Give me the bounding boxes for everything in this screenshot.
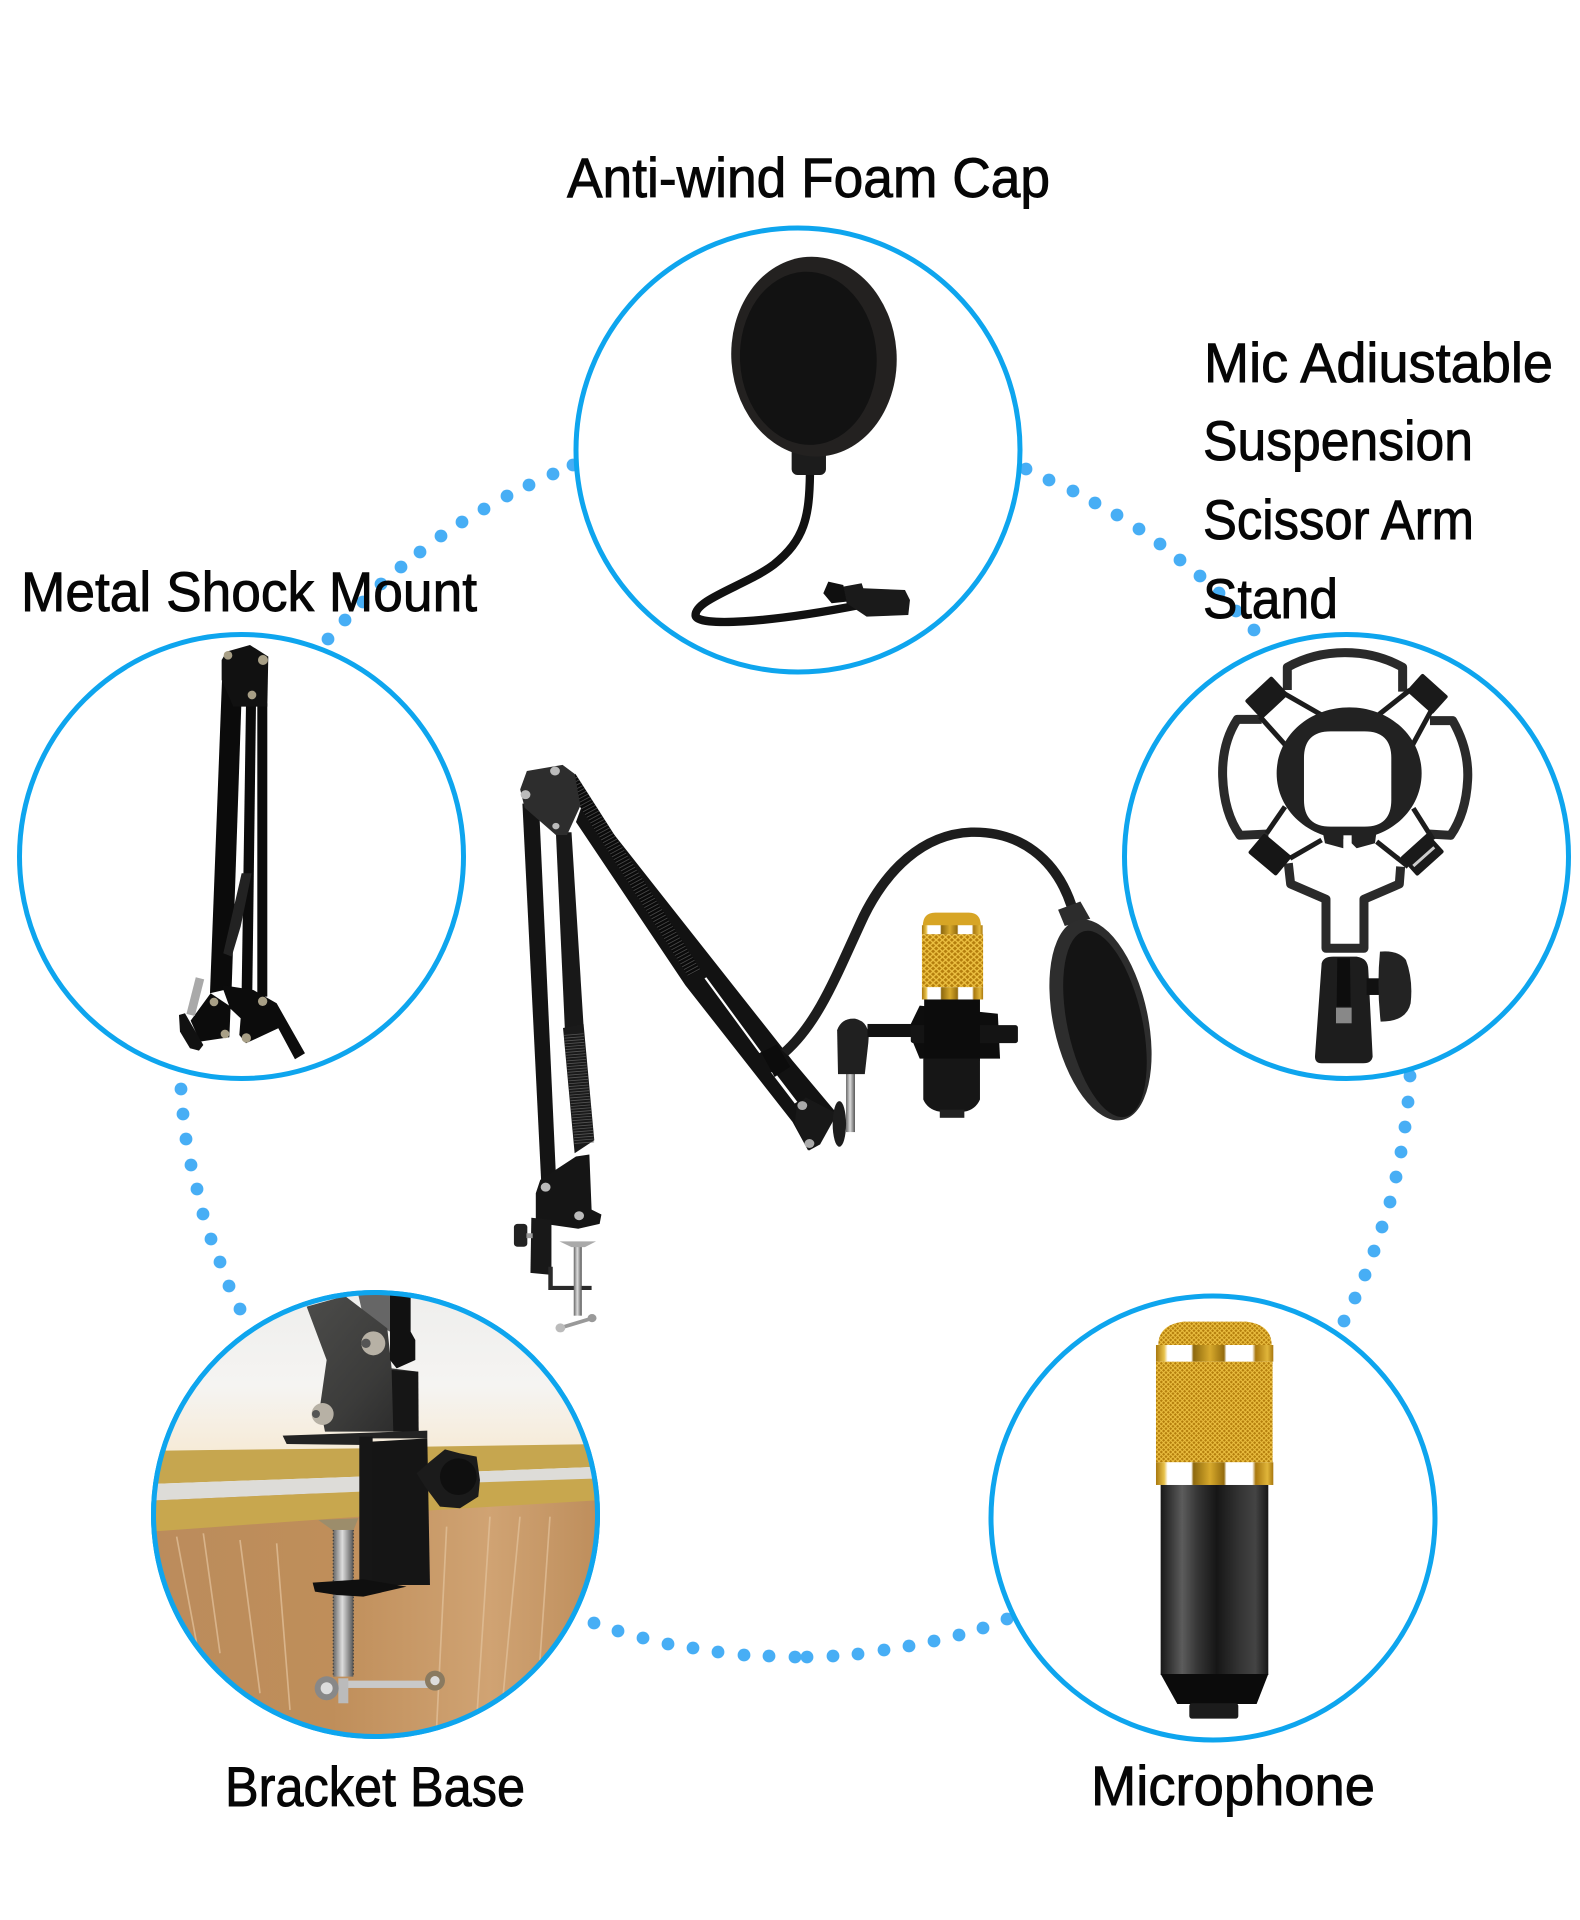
- dots: shock mount to bracket base: [175, 1083, 246, 1315]
- label: mic adjustable suspension scissor arm stand: Scissor Arm: [1203, 488, 1474, 551]
- boom arm: [514, 765, 837, 1332]
- dotted connector ring: [175, 459, 1416, 1663]
- icon: folded scissor arm: [179, 645, 305, 1059]
- label: mic adjustable suspension scissor arm stand: Suspension: [1203, 409, 1473, 472]
- pop filter: [1033, 902, 1168, 1128]
- small microphone: [922, 913, 983, 1118]
- label: bracket base: Bracket Base: [225, 1755, 525, 1818]
- photo: clamp on desk: [150, 1290, 603, 1740]
- panel: bracket base: [150, 1290, 603, 1740]
- center illustration: full mic kit on arm: [514, 765, 1168, 1332]
- label: mic adjustable suspension scissor arm stand: [1203, 331, 1553, 630]
- label: anti-wind foam cap: Anti-wind Foam Cap: [567, 146, 1050, 209]
- panel: microphone: [991, 1296, 1435, 1740]
- holder and shock mount: [795, 1006, 1018, 1150]
- dots: bracket base to microphone: [588, 1613, 1013, 1663]
- dots: foam cap to shock mount: [322, 459, 579, 645]
- label: metal shock mount: Metal Shock Mount: [21, 560, 477, 623]
- label: microphone: Microphone: [1091, 1754, 1375, 1817]
- gooseneck: [784, 832, 1071, 1053]
- dots: foam cap to suspension arm: [1020, 463, 1260, 636]
- panel: suspension scissor arm stand: [1124, 634, 1568, 1078]
- label: mic adjustable suspension scissor arm stand: Mic Adiustable: [1204, 331, 1553, 394]
- label: mic adjustable suspension scissor arm stand: Stand: [1203, 567, 1338, 630]
- dots: suspension arm to microphone: [1338, 1070, 1416, 1327]
- icon: pop filter: [696, 251, 910, 622]
- panel: metal shock mount: [20, 634, 464, 1078]
- panel: anti-wind foam cap: [576, 228, 1020, 672]
- icon: shock mount cradle: [1223, 653, 1468, 1063]
- icon: microphone: [1156, 1322, 1273, 1719]
